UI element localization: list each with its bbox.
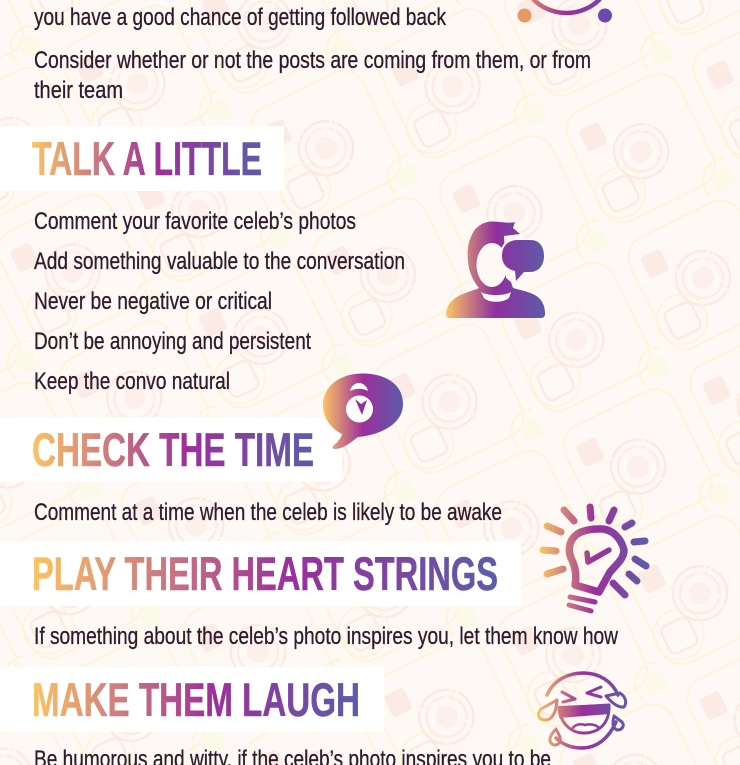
- check mark: [587, 550, 609, 562]
- heading: make them laugh: [0, 667, 384, 732]
- tip 5: Keep the convo natural: [34, 368, 230, 395]
- icon: person with speech bubble: [446, 221, 545, 318]
- heading: talk a little: [0, 126, 284, 191]
- bulb base: [569, 597, 595, 611]
- face outline: [547, 673, 618, 748]
- heading: check the time: [0, 417, 342, 482]
- collar: [481, 292, 511, 302]
- text: consider posts: Consider whether or not the posts are coming from them, or from: [34, 47, 591, 74]
- rays: [543, 507, 646, 595]
- icon: lightbulb with check: [543, 507, 646, 611]
- bulb outline: [569, 529, 624, 592]
- heading: check the time: CHECK THE TIME: [32, 423, 314, 476]
- text: check the time tip: Comment at a time when the celeb is likely to be awake: [34, 499, 502, 526]
- text: their team: their team: [34, 77, 123, 104]
- section intro text: [34, 4, 591, 104]
- heading: play their heart strings: PLAY THEIR HEART STRINGS: [32, 547, 498, 600]
- tears: [538, 693, 626, 745]
- tip 1: Comment your favorite celeb’s photos: [34, 208, 356, 235]
- icon: cropped circle with dots: [518, 0, 612, 22]
- tip 4: Don’t be annoying and persistent: [34, 328, 311, 355]
- face: [476, 243, 508, 287]
- tip 3: Never be negative or critical: [34, 288, 272, 315]
- eyes: [562, 687, 601, 702]
- icon: clock speech bubble: [323, 373, 403, 449]
- mouth: [559, 705, 609, 733]
- body and hair: [446, 221, 545, 318]
- speech bubble: [502, 240, 544, 281]
- text: followed back line: you have a good chance of getting followed back: [34, 4, 447, 31]
- list: talk a little tips: [34, 208, 405, 395]
- tip 2: Add something valuable to the conversation: [34, 248, 405, 275]
- heading: talk a little: TALK A LITTLE: [32, 132, 262, 185]
- icon: laughing emoji: [538, 673, 626, 748]
- heading: make them laugh: MAKE THEM LAUGH: [32, 673, 360, 726]
- heading: play their heart strings: [0, 541, 521, 606]
